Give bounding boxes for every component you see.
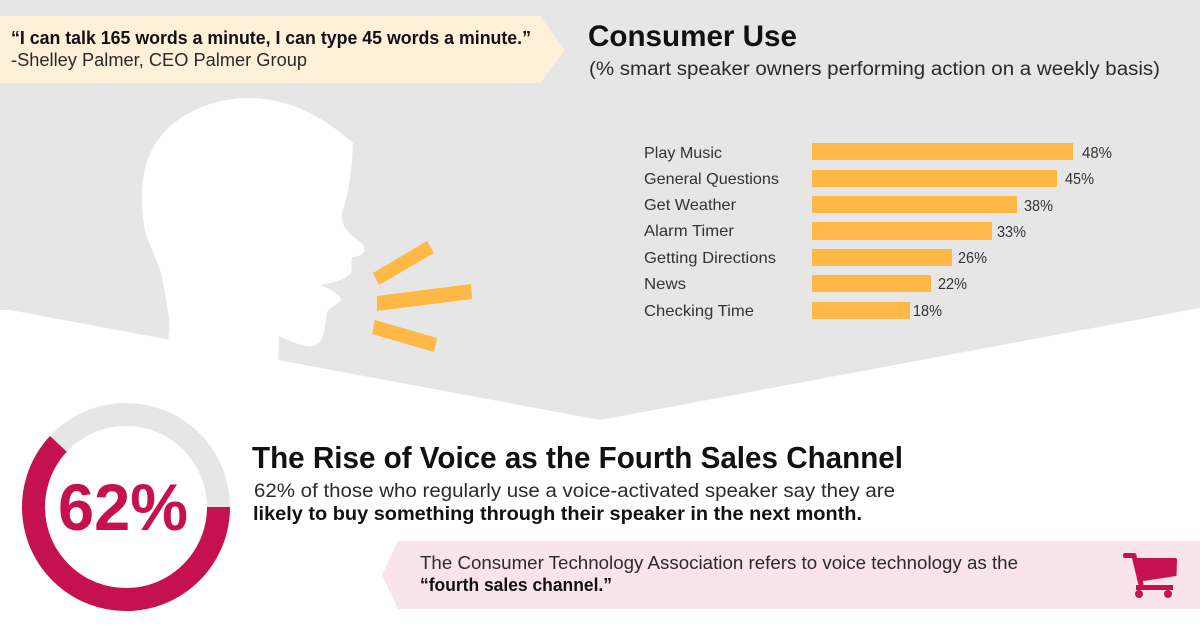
bar: general questions: 45% [1065, 171, 1094, 188]
bar: play music: Play Music [644, 145, 722, 162]
bar: get weather: Get Weather [644, 197, 737, 214]
quote banner: -Shelley Palmer, CEO Palmer Group [11, 50, 307, 70]
donut chart: 62% [33, 414, 218, 600]
bar: general questions: General Questions [644, 171, 779, 188]
heading: consumer use: Consumer Use [588, 20, 797, 53]
bar: getting directions: 26% [958, 250, 987, 267]
bar: alarm timer: 33% [997, 224, 1026, 241]
text block: 62% statement: 62% of those who regularly use a voice-activated speaker say they are [254, 481, 895, 502]
bar: get weather [644, 196, 1053, 215]
callout banner: The Consumer Technology Association refers to voice technology as the [420, 553, 1018, 573]
icon: speaking head silhouette [142, 98, 365, 362]
callout banner [382, 541, 1200, 609]
bar chart [644, 143, 1112, 320]
bar: alarm timer: Alarm Timer [644, 223, 735, 240]
bar: checking time: Checking Time [644, 303, 754, 320]
icon: shopping cart [1123, 553, 1177, 598]
bar: play music: 48% [1082, 145, 1112, 162]
bar: checking time: 18% [913, 303, 942, 320]
grey background panel [0, 0, 1200, 420]
icon: speech rays [372, 241, 472, 352]
bar: getting directions: Getting Directions [644, 250, 776, 267]
quote banner: “I can talk 165 words a minute, I can type 45 words a minute.” [11, 28, 531, 48]
bar: get weather: 38% [1024, 198, 1053, 215]
callout banner: “fourth sales channel.” [420, 575, 612, 595]
heading: fourth sales channel: The Rise of Voice as the Fourth Sales Channel [252, 440, 903, 475]
bar: checking time [644, 302, 942, 320]
subheading: consumer use: (% smart speaker owners performing action on a weekly basis) [589, 59, 1160, 80]
quote banner [0, 16, 565, 83]
donut chart: 62%: 62% [58, 470, 188, 544]
bar: news [644, 275, 967, 293]
bar: play music [644, 143, 1112, 162]
text block: 62% statement [253, 481, 895, 525]
bar: news: News [644, 276, 686, 293]
text block: 62% statement: likely to buy something through their speaker in the next month. [253, 504, 862, 525]
bar: general questions [644, 170, 1094, 188]
bar: getting directions [644, 249, 987, 267]
bar: news: 22% [938, 276, 967, 293]
bar: alarm timer [644, 222, 1026, 241]
